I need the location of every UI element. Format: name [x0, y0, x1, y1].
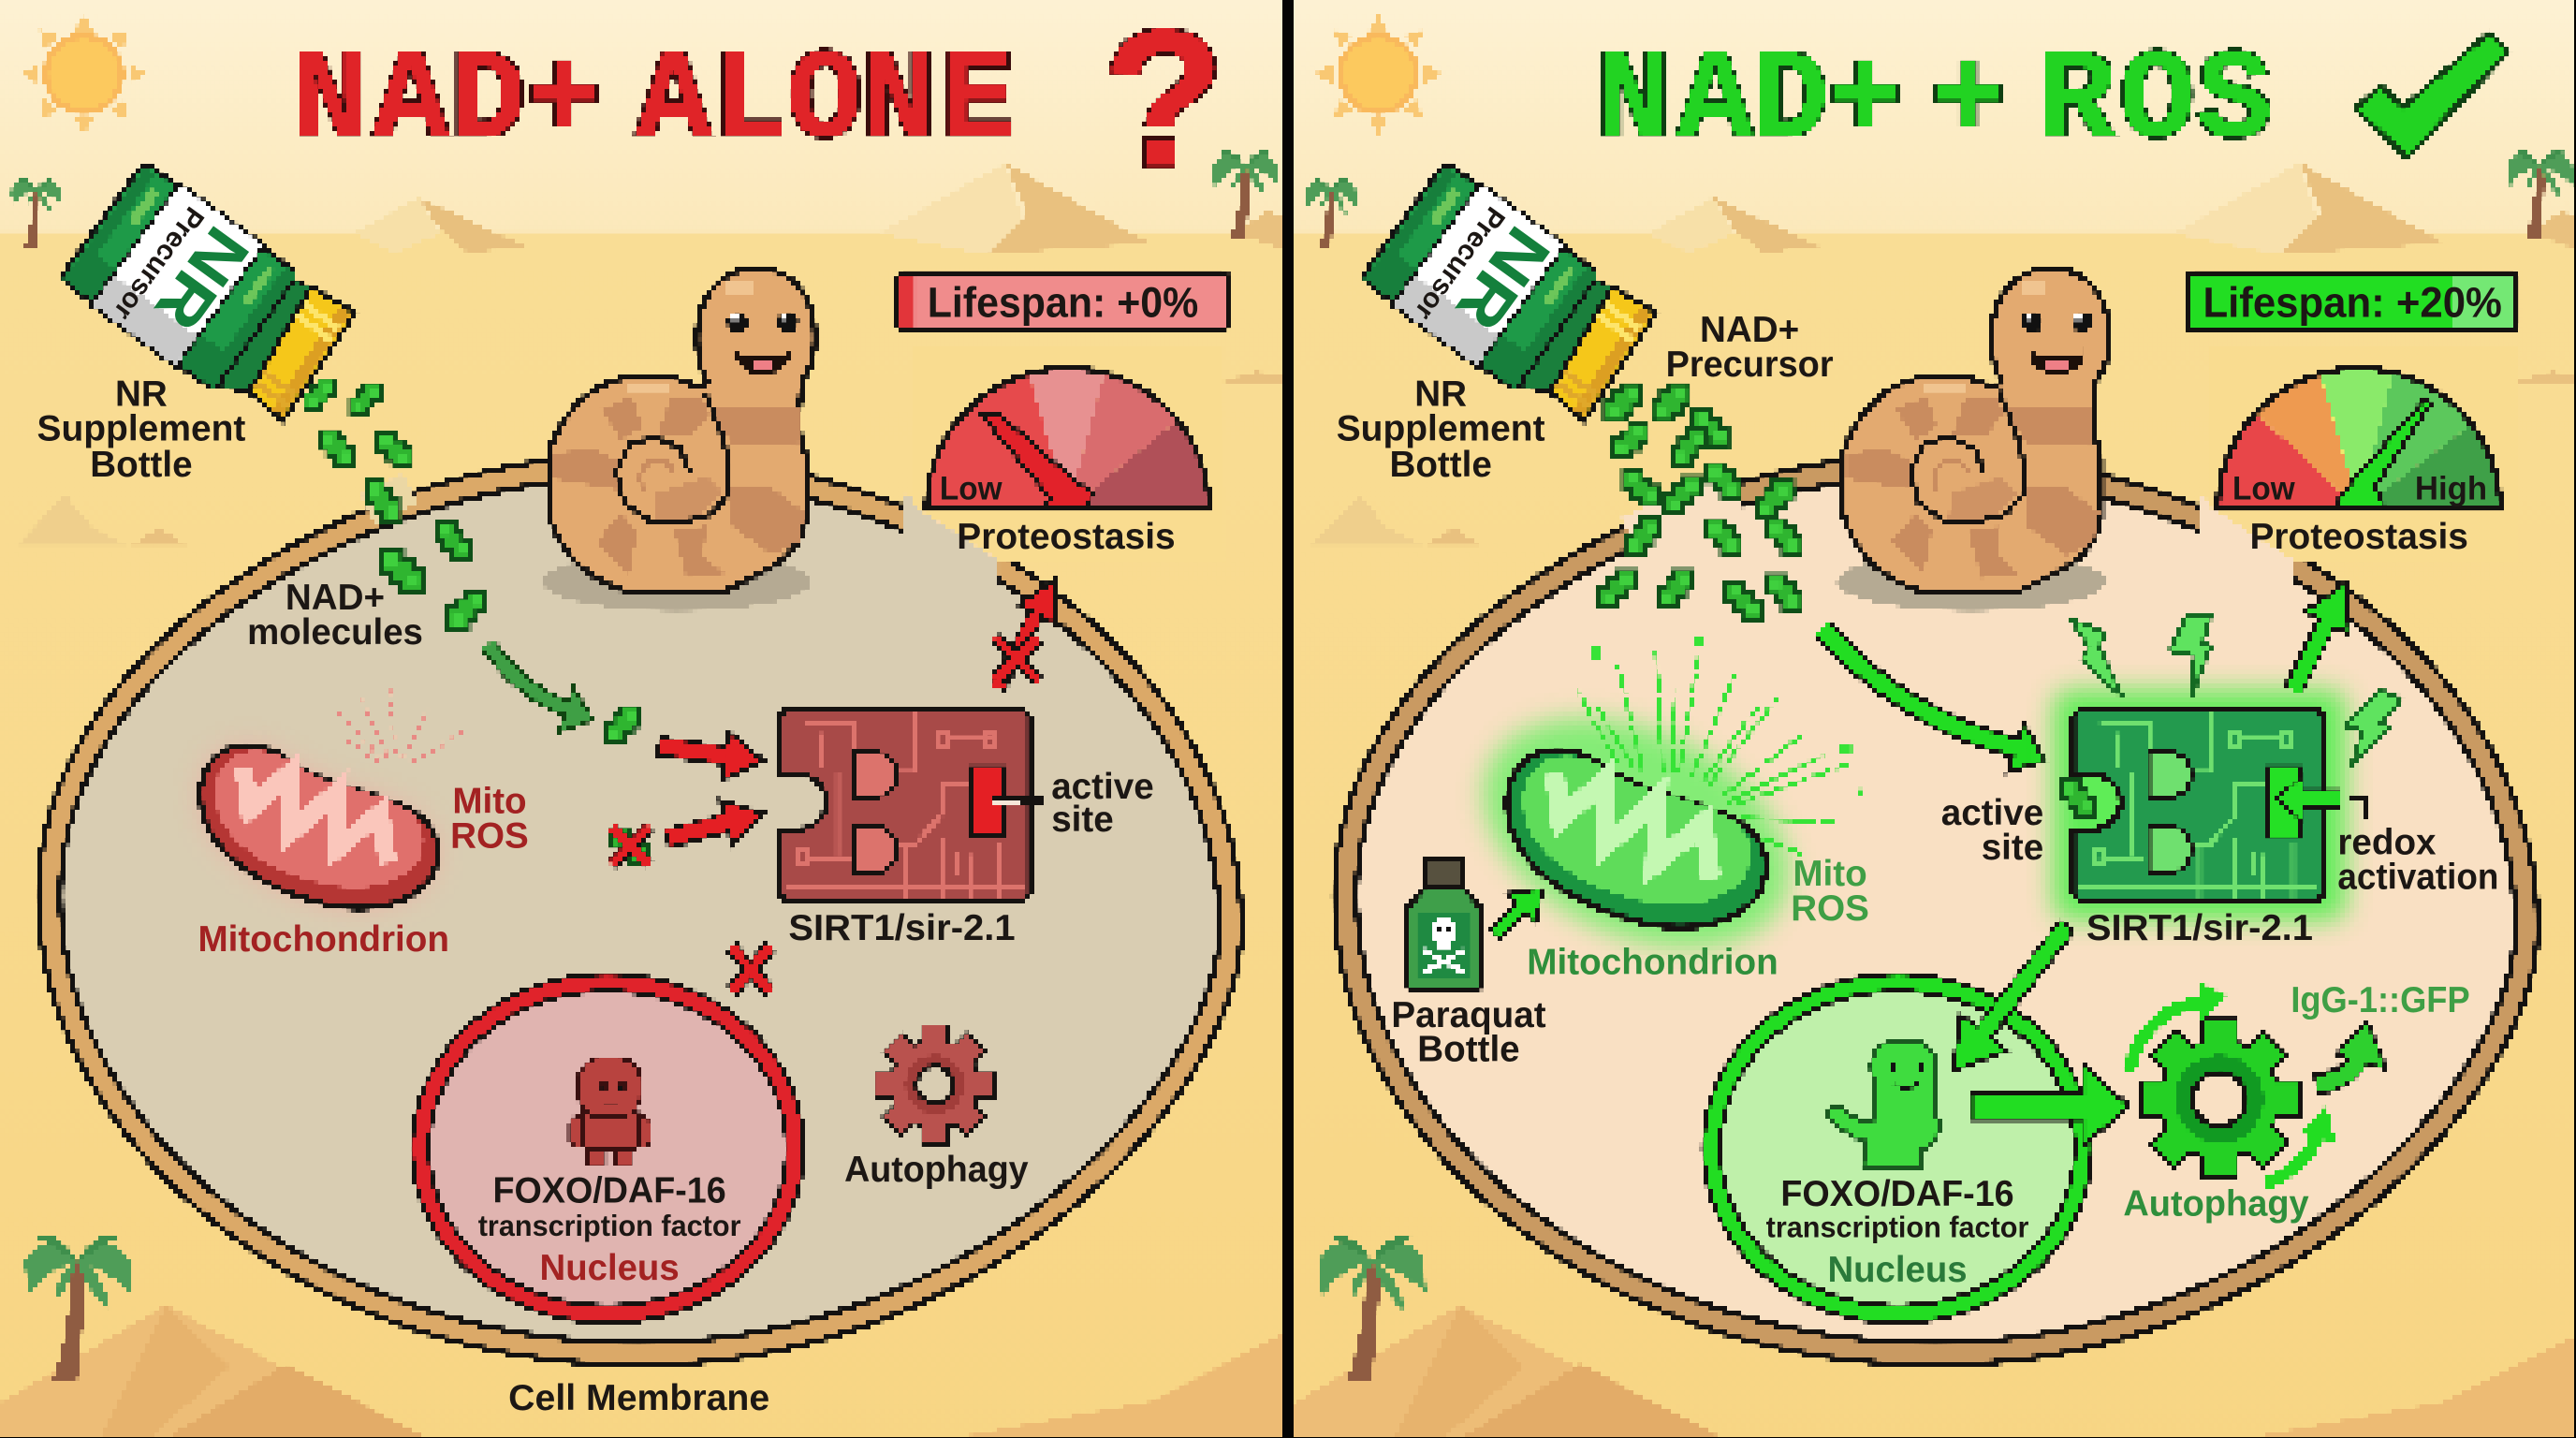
curved arrow to chip	[1822, 627, 2045, 772]
panel artwork: NAD+ alone	[0, 0, 1297, 1438]
paraquat label	[1391, 995, 1546, 1070]
bottle caption: Supplement	[1337, 408, 1545, 448]
red arrow to SIRT1 lower	[666, 800, 764, 846]
panel: NAD+ + ROS	[1291, 0, 2576, 1438]
mito ROS label	[450, 782, 529, 857]
active site label	[1941, 793, 2043, 868]
worm	[1837, 268, 2109, 611]
curved green arrow	[488, 644, 593, 733]
active site label: site	[1982, 828, 2043, 868]
lifespan text: Lifespan: +20%	[2203, 279, 2502, 327]
active site arrow	[2276, 775, 2339, 822]
proteostasis label: Proteostasis	[2249, 517, 2468, 557]
NAD+ molecules label	[247, 578, 423, 653]
arrow paraquat to mitochondrion	[1493, 888, 1543, 935]
NAD+ molecules label: molecules	[247, 612, 423, 653]
FOXO label	[478, 1171, 741, 1288]
mitochondrion	[200, 745, 438, 908]
panel divider	[1283, 0, 1294, 1438]
mito ROS dots	[337, 690, 463, 762]
bottle caption	[1337, 374, 1545, 485]
redox activation label	[2337, 823, 2498, 897]
FOXO label: FOXO/DAF-16	[1780, 1174, 2014, 1214]
blocked molecule X inner	[611, 827, 649, 864]
cell membrane band	[1345, 465, 2526, 1354]
bottle label text	[1409, 199, 1564, 364]
NAD+ molecules label: NAD+	[285, 578, 385, 618]
autophagy label: Autophagy	[844, 1150, 1029, 1190]
redox bracket	[2348, 799, 2367, 820]
membrane opening under label	[903, 496, 1002, 585]
desert background	[1291, 0, 2576, 1438]
bottle label text: Precursor	[1409, 201, 1511, 326]
bottle caption: Bottle	[90, 445, 193, 485]
bottle caption: NR	[1414, 374, 1467, 414]
membrane gap	[368, 488, 411, 509]
cell membrane band	[50, 465, 1230, 1354]
gauge scale labels	[2232, 471, 2487, 507]
gauge scale labels: High	[2415, 471, 2487, 507]
FOXO figure	[570, 1058, 651, 1165]
proteostasis label: Proteostasis	[957, 517, 1176, 557]
bottle caption: Bottle	[1389, 445, 1492, 485]
paraquat bottle	[1406, 859, 1482, 990]
NAD+ precursor label: NAD+	[1700, 310, 1799, 350]
redox activation label: redox	[2337, 823, 2437, 863]
panel: NAD+ alone	[0, 0, 1297, 1438]
membrane gap under molecules	[1630, 492, 1738, 536]
low label: Low	[940, 471, 1003, 507]
FOXO worm figure	[1825, 1040, 1941, 1167]
nucleus	[1712, 982, 2083, 1314]
arrow nucleus to autophagy	[1969, 1064, 2129, 1147]
mito ROS label: Mito	[452, 782, 527, 822]
cell membrane	[1345, 465, 2526, 1354]
bottle label text: Precursor	[108, 201, 210, 326]
panel labels: NAD+ + ROS	[1337, 199, 2502, 1290]
FOXO label: Nucleus	[1827, 1250, 1968, 1290]
SIRT1 circuit chip	[2073, 710, 2324, 901]
question mark: ?	[1104, 0, 1226, 227]
SIRT1 label: SIRT1/sir-2.1	[2086, 908, 2313, 948]
SIRT1 label: SIRT1/sir-2.1	[788, 908, 1016, 948]
title: NAD+ ALONE	[292, 31, 1016, 174]
membrane opening under label	[2198, 492, 2293, 594]
bottle caption: Supplement	[37, 408, 246, 448]
cell membrane	[50, 465, 1230, 1354]
bottle caption: NR	[115, 374, 168, 414]
autophagy gear	[877, 1027, 992, 1142]
desert background	[0, 0, 1297, 1438]
mitochondrion label: Mitochondrion	[198, 919, 449, 960]
nucleus	[420, 982, 795, 1314]
supplement bottle	[57, 159, 360, 436]
arrow up to proteostasis	[2293, 581, 2349, 690]
mito ROS label: ROS	[450, 816, 529, 857]
FOXO label: FOXO/DAF-16	[492, 1171, 726, 1211]
mitochondrion label: Mitochondrion	[1527, 943, 1778, 983]
mitochondrion glow and rays	[1447, 638, 1865, 993]
rotating arrows	[2129, 981, 2336, 1183]
autophagy label: Autophagy	[2123, 1184, 2309, 1225]
mito ROS label	[1791, 854, 1869, 929]
bottle label text: NR	[141, 213, 263, 344]
bottle caption	[37, 374, 246, 485]
autophagy gear	[2142, 1021, 2297, 1177]
gauge backdrop	[913, 379, 1226, 562]
SIRT1 circuit chip	[779, 710, 1045, 901]
blocked arrow to proteostasis	[996, 580, 1055, 688]
gauge backdrop	[2208, 345, 2518, 560]
red X to nucleus	[731, 946, 770, 992]
mito ROS label: Mito	[1793, 854, 1867, 894]
check mark	[2356, 33, 2509, 157]
IgG label: IgG-1::GFP	[2291, 980, 2470, 1020]
FOXO label: transcription factor	[478, 1209, 741, 1242]
GFP arrow	[2315, 1020, 2387, 1084]
lifespan badge	[2188, 271, 2518, 331]
mitochondrion	[1507, 750, 1766, 928]
NAD+ precursor label: Precursor	[1666, 345, 1834, 385]
cell membrane label: Cell Membrane	[508, 1378, 769, 1418]
FOXO label	[1766, 1174, 2028, 1290]
chip glow	[2054, 690, 2346, 920]
FOXO label: transcription factor	[1766, 1211, 2028, 1244]
lifespan badge	[898, 271, 1228, 331]
supplement bottle	[1358, 159, 1661, 436]
active site label: site	[1051, 800, 1114, 840]
lifespan text: Lifespan: +0%	[928, 279, 1198, 327]
NAD+ molecules	[304, 379, 647, 863]
red arrow to SIRT1 upper	[657, 731, 764, 781]
panel artwork: NAD+ + ROS	[1291, 0, 2576, 1438]
proteostasis gauge	[2217, 368, 2500, 509]
active site label	[1051, 767, 1154, 840]
paraquat label: Bottle	[1417, 1030, 1520, 1070]
gauge scale labels: Low	[2232, 471, 2295, 507]
proteostasis gauge	[927, 368, 1209, 509]
NAD+ molecules	[1600, 384, 2096, 815]
redox activation label: activation	[2337, 857, 2498, 897]
paraquat label: Paraquat	[1391, 995, 1546, 1035]
active site label: active	[1941, 793, 2043, 833]
worm	[542, 268, 814, 611]
arrow chip to nucleus	[1954, 925, 2069, 1071]
FOXO label: Nucleus	[540, 1248, 680, 1288]
bottle label text: NR	[1442, 213, 1564, 344]
lightning bolts	[2071, 614, 2402, 764]
mito ROS label: ROS	[1791, 888, 1869, 929]
blocked molecule X	[611, 827, 649, 864]
NAD+ precursor label	[1666, 310, 1834, 385]
active site label: active	[1051, 767, 1154, 807]
panel labels: NAD+ alone	[37, 199, 1198, 1418]
title: NAD+ + ROS	[1595, 31, 2273, 174]
bottle label text	[108, 199, 263, 364]
